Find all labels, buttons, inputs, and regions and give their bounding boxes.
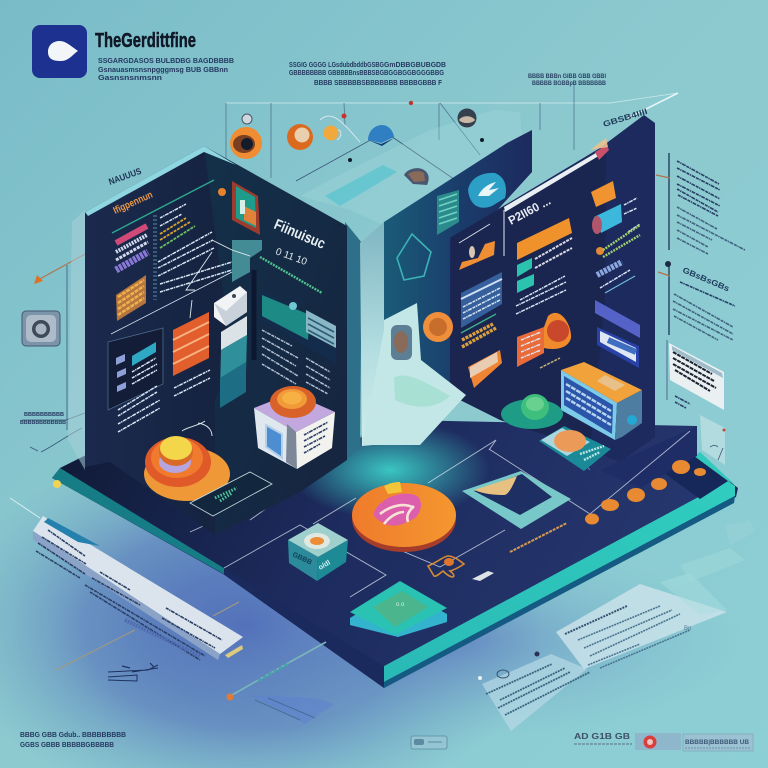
right panel: purple list — [595, 300, 640, 338]
right panel: column icons — [591, 181, 640, 288]
right annotations: text block 1 — [677, 161, 720, 216]
right annotations: text block 4 — [673, 294, 733, 340]
top text block centre: SSGIG GGGG LGsdubdbddbGSBG — [289, 62, 384, 69]
upper translucent card — [556, 520, 755, 669]
right annotations: white card — [669, 343, 724, 410]
header description: Gsnauasmsnsnpgggmsg BUB GBBnn — [98, 67, 228, 74]
left panel: heading: Ifigpennun — [112, 190, 155, 217]
lower translucent card — [478, 652, 590, 731]
teal small cube — [288, 523, 348, 581]
right annotations: text block 3: GBsBsGBs — [681, 266, 731, 294]
side annotation: small text: BBBBBBBBBBBB — [20, 420, 66, 426]
right panel: pale left edge — [360, 222, 384, 446]
left bottom card — [10, 498, 243, 670]
left panel: right page heading: Fiinuisuc — [271, 216, 328, 253]
green button — [501, 394, 563, 429]
top diagram: floating icons and guide lines — [226, 85, 678, 225]
right panel: dark section — [450, 115, 655, 462]
platform circuit lines — [190, 396, 690, 597]
top text block right: BBBB BBBn GIBB GBB GBBI — [528, 74, 606, 80]
icon: orange ring — [287, 124, 313, 150]
header description: Gasnsnsnmsnn — [98, 75, 162, 82]
right panel: orange circle — [423, 312, 453, 342]
icon: orange ring with dark core — [230, 114, 262, 159]
left panel: left page — [85, 146, 232, 535]
right panel: phone — [391, 325, 412, 360]
left panel: text lines lower right — [262, 330, 330, 394]
teal device — [350, 581, 447, 637]
left panel: coloured list — [116, 226, 148, 270]
side annotation: pointer line — [22, 254, 85, 430]
right panel: pale lower sheet — [362, 303, 466, 445]
right panel: blue list — [461, 272, 502, 347]
teal device: o o — [396, 602, 405, 608]
text above right panel: GBSB4IIII — [602, 107, 649, 129]
left panel: arrows — [186, 240, 250, 318]
title: TheGerdittfine — [95, 30, 196, 52]
left panel: teal tablet — [232, 181, 262, 282]
left panel: white bracket icon — [214, 286, 247, 408]
left panel: green rule — [260, 257, 322, 293]
right panel: gold line — [540, 358, 560, 368]
left panel: image card — [254, 270, 336, 364]
right annotations: vertical guide — [656, 153, 671, 400]
top text block centre: BGGBGGBGGGBBG — [384, 70, 444, 77]
right panel: cyan icon — [468, 173, 506, 208]
right panel: heading: P2II60 ... — [506, 194, 553, 228]
gold emblems on platform — [428, 556, 494, 581]
top text block centre — [289, 62, 446, 87]
left panel: right page — [204, 146, 347, 535]
right panel: hex outline icon — [397, 234, 431, 280]
header: logo — [32, 25, 87, 78]
bottom-left caption — [20, 732, 126, 749]
laptop — [561, 362, 642, 440]
icon: amber ball — [324, 126, 341, 140]
bottom-left caption: BBBG GBB Gdub.. BBBBBBBBB — [20, 732, 126, 739]
left panel: orange stripes — [173, 312, 210, 396]
teal small cube: o/dl — [318, 559, 332, 572]
side annotation: camera icon — [22, 311, 60, 346]
right panel — [360, 115, 655, 462]
left panel: lower left list — [108, 328, 163, 432]
orange stacked button — [144, 421, 230, 501]
right panel: orange chart — [459, 224, 495, 270]
left panel: centre text lines — [111, 204, 232, 334]
green data tile — [190, 472, 272, 516]
footer: table: BBBBB|BBBBBB UB — [685, 739, 749, 746]
right panel: orange document — [517, 313, 571, 367]
footer: table — [683, 734, 753, 751]
footer: caption: AD G1B GB — [574, 732, 630, 741]
right panel: teal grid — [437, 190, 459, 235]
left panel: sub heading: 0 11 10 — [274, 246, 309, 268]
right panel: teal section — [384, 130, 532, 390]
right panel: teal chips and lines — [516, 238, 572, 314]
left panel: side edge — [345, 222, 362, 462]
right lower translucent bracket — [700, 415, 726, 465]
dark screen tile — [462, 471, 571, 529]
right panel: orange bar — [517, 218, 572, 260]
top text block centre: BBB BBBBGBBB F — [384, 80, 443, 87]
footer: red icon tile — [635, 733, 681, 750]
top text block centre: GmDBBGBUBGDB — [384, 62, 446, 69]
central orange disc — [352, 482, 456, 552]
top text block centre: GBBBBBBBB GBBBBBnsBBBSBG — [289, 70, 384, 77]
footer: caption — [574, 732, 632, 744]
small glyph sketch below card — [108, 663, 158, 681]
icon: blue dome — [368, 125, 394, 146]
right panel: small orange card — [468, 350, 502, 388]
white cube — [254, 386, 335, 469]
icon: grey dome — [458, 108, 476, 128]
platform caption lines — [510, 523, 567, 552]
teal small cube: GBBB — [291, 551, 313, 567]
side annotation: small text: BBBBBBBBBB — [24, 412, 64, 418]
top text block right — [528, 74, 607, 87]
bottom-left caption: GGBS GBBB BBBBBGBBBBB — [20, 742, 114, 749]
top text block centre: BBBB SBBBBBSBBBB — [314, 80, 384, 87]
header description — [98, 58, 234, 82]
right panel: blue white card — [597, 327, 639, 368]
platform base — [52, 420, 738, 688]
side annotation: small text — [20, 166, 143, 452]
footer: small badge — [411, 736, 447, 749]
side annotation: small text: NAUUUS — [107, 166, 143, 187]
left panel: orange block — [116, 275, 146, 321]
right annotations: text block 3 — [680, 266, 735, 306]
left panel: top rule and dot — [112, 180, 226, 233]
orange chips on platform edge — [585, 460, 706, 524]
orange tile — [539, 426, 611, 471]
header description: SSGARGDASOS BULBDBG BAGDBBBB — [98, 58, 234, 65]
left panel — [68, 146, 362, 535]
top text block right: BBBBB BGBBpB BBBBBBB — [532, 81, 607, 87]
icon: brown cap — [404, 168, 429, 185]
pointer with orange dot — [226, 642, 334, 724]
right annotations: text block 2 — [677, 207, 745, 254]
upper translucent card: Bn — [684, 626, 691, 632]
